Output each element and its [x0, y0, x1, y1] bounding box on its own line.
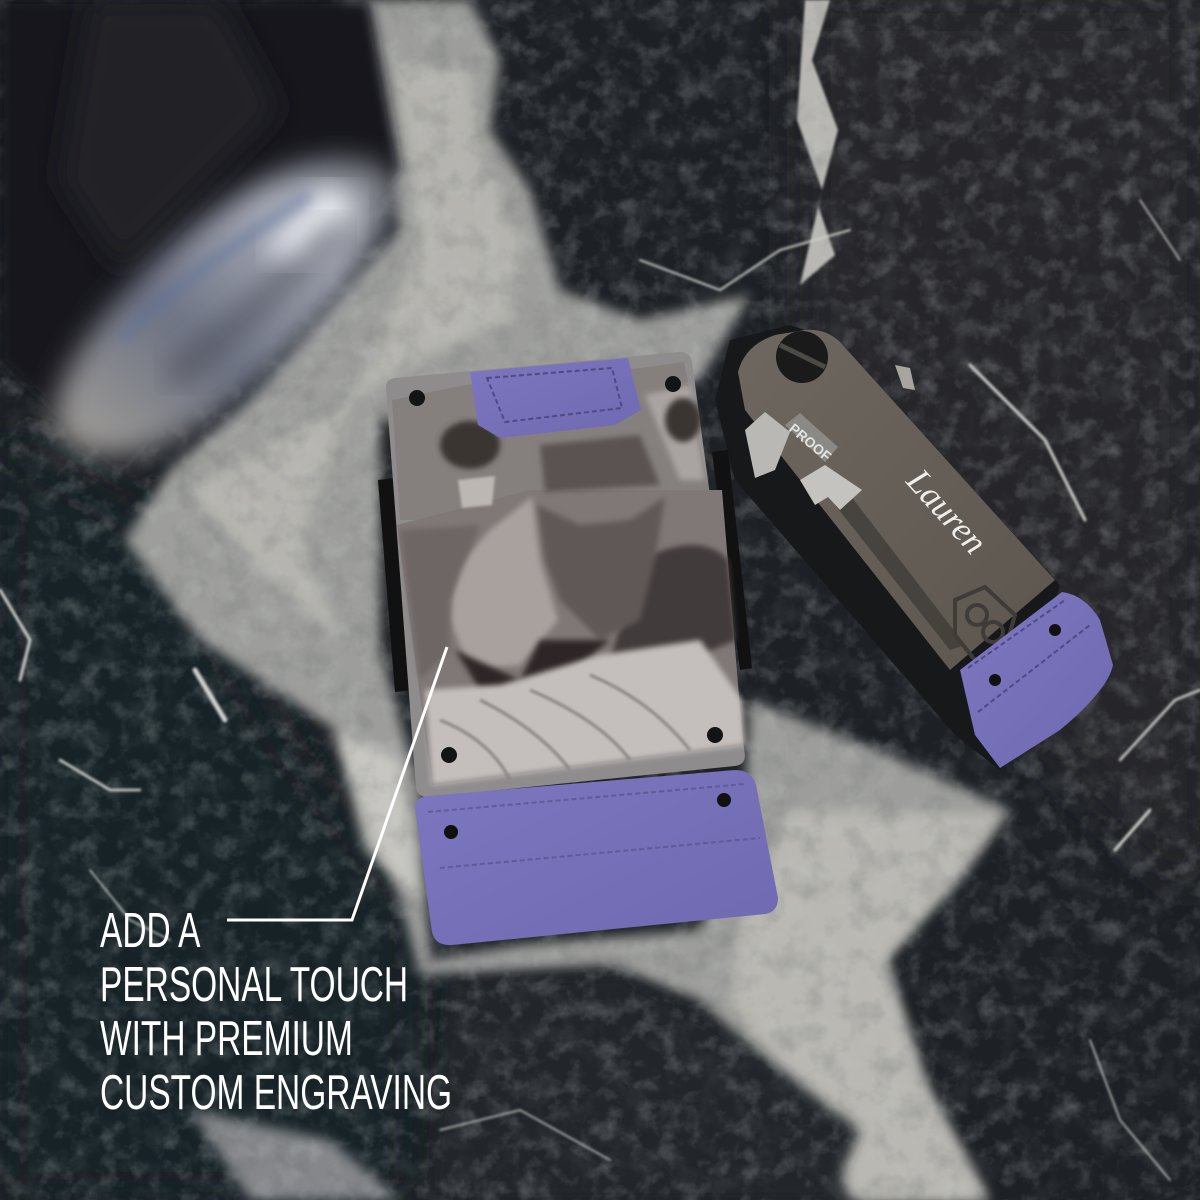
keyholder lavender strap: [960, 592, 1113, 768]
keyholder: [715, 325, 1113, 770]
elastic bands: [378, 478, 415, 692]
key: PROOF: [786, 420, 835, 465]
shelves: [540, 435, 660, 492]
sofa dark: [610, 545, 736, 680]
plant: [440, 421, 500, 469]
top lavender pull tab: [470, 358, 641, 438]
blurred glass object: [0, 0, 400, 470]
caption: [100, 904, 452, 1120]
wallet plate: [386, 352, 745, 797]
tab: [895, 365, 915, 390]
cat shadow and pillow: [400, 525, 480, 680]
engraved name: Lauren: [898, 461, 995, 562]
marble: pale central vein: [125, 0, 1010, 1200]
screw: [776, 331, 828, 383]
keyholder plate: [738, 330, 1055, 670]
caption: ADD A: [100, 904, 200, 958]
knit blanket: [425, 640, 745, 785]
wallet screws: [409, 376, 723, 763]
callout leader line: [227, 647, 447, 920]
caption: PERSONAL TOUCH: [100, 958, 408, 1012]
orange cat: [450, 497, 558, 670]
marble: dark lower patches: [430, 975, 860, 1200]
key: [745, 412, 862, 510]
bottom lavender strap: [415, 770, 778, 945]
wallet: [378, 352, 778, 945]
engraved photo: [397, 385, 745, 785]
grey cat: [537, 497, 665, 640]
caption: WITH PREMIUM: [100, 1012, 353, 1066]
hex logo: [955, 587, 1015, 660]
caption: CUSTOM ENGRAVING: [100, 1066, 452, 1120]
